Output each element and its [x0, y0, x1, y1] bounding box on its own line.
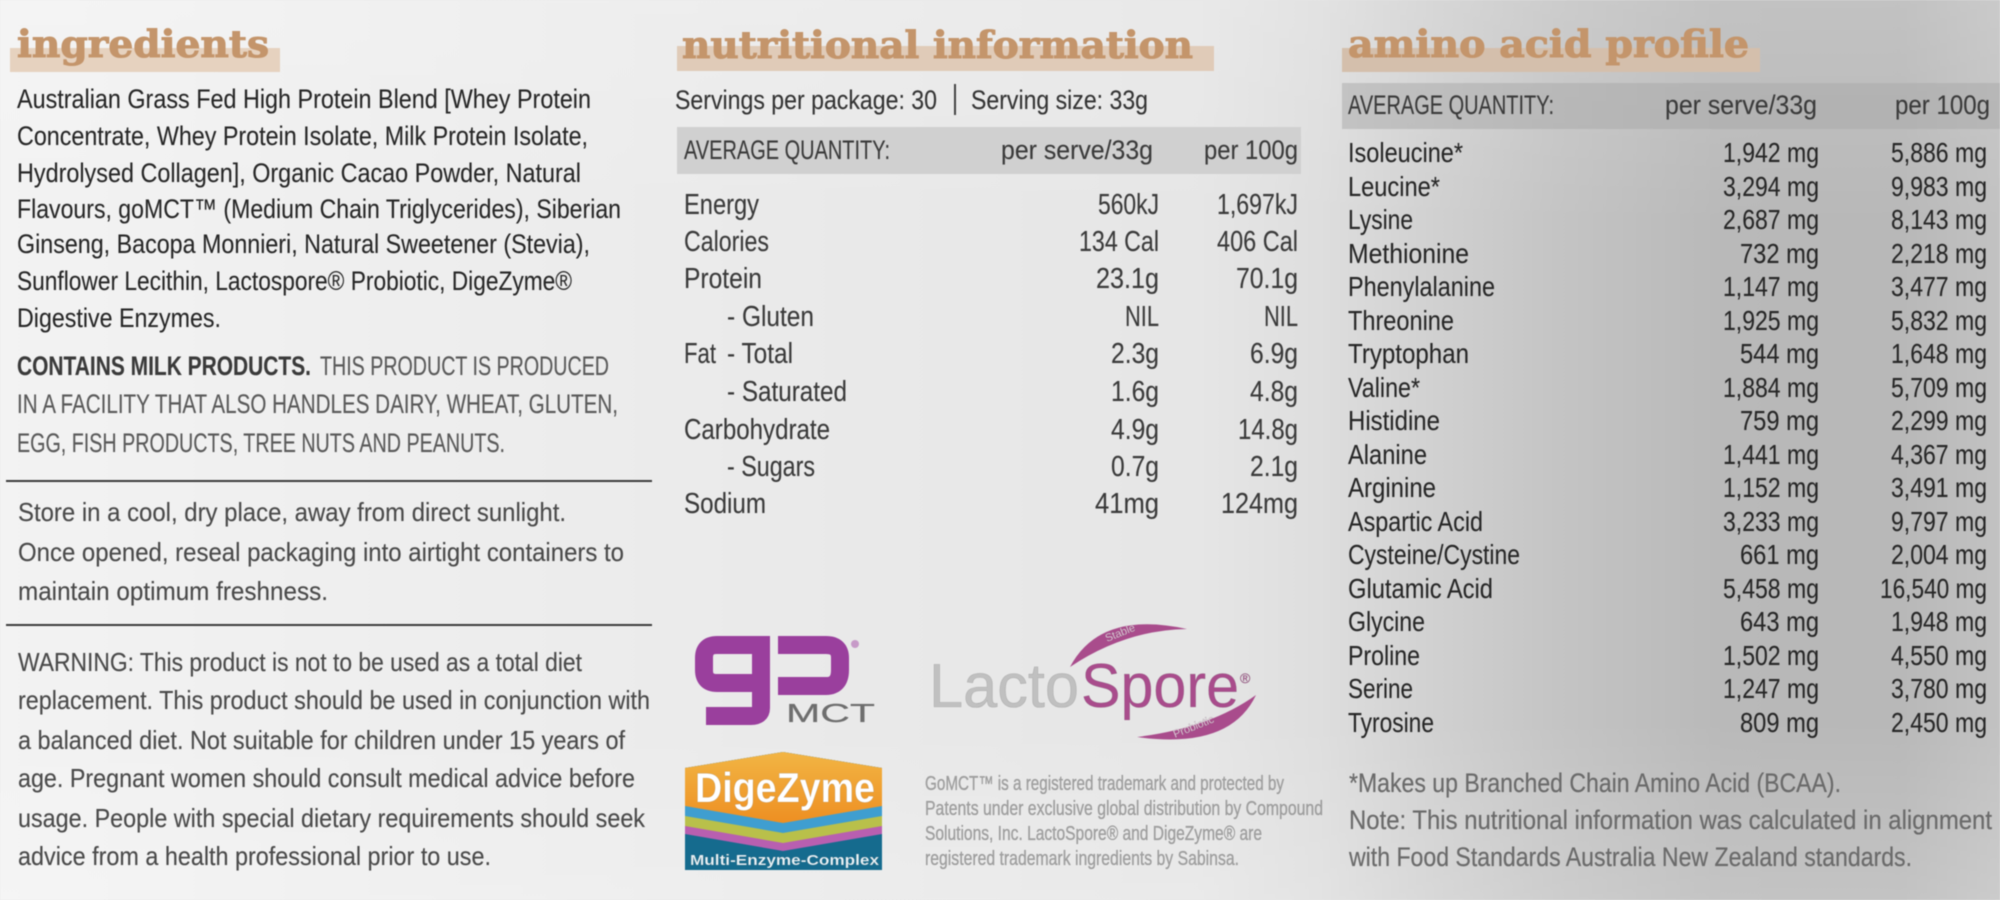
- heading: nutritional information: nutritional information: [682, 23, 1193, 67]
- row: calories: 406 Cal: [1217, 226, 1298, 258]
- icon: DigeZyme logo: DigeZyme: [695, 764, 875, 811]
- row: aspartic acid: 3,233 mg: [1723, 506, 1819, 537]
- icon: LactoSpore logo: [929, 622, 1256, 741]
- row: serine: 1,247 mg: [1723, 673, 1819, 704]
- row: histidine: [1348, 405, 1987, 436]
- row: fat total: 6.9g: [1250, 338, 1298, 370]
- row: glycine: 643 mg: [1740, 606, 1819, 637]
- panel: nutritional information: [675, 23, 1323, 870]
- table header: AVERAGE QUANTITY:: [1348, 90, 1554, 120]
- row: gluten: [727, 301, 1298, 333]
- text block: storage: maintain optimum freshness.: [18, 576, 328, 606]
- row: valine: [1348, 372, 1987, 403]
- row: tryptophan: [1348, 338, 1987, 369]
- row: alanine: 1,441 mg: [1723, 439, 1819, 470]
- icon: goMCT logo: [704, 640, 875, 728]
- row: fat total: - Total: [727, 338, 793, 370]
- row: alanine: [1348, 439, 1987, 470]
- row: sodium: 124mg: [1221, 488, 1298, 520]
- row: sugars: 2.1g: [1250, 451, 1298, 483]
- row: carbohydrate: 4.9g: [1111, 414, 1159, 446]
- text block: warning: usage. People with special dietary requirements should seek: [18, 803, 646, 833]
- row: saturated: [727, 376, 1298, 408]
- row: isoleucine: 1,942 mg: [1723, 137, 1819, 168]
- text block: allergen statement: IN A FACILITY THAT ALSO HANDLES DAIRY, WHEAT, GLUTEN,: [17, 389, 618, 419]
- text block: warning: [18, 647, 650, 871]
- nutrition table rows: [684, 189, 1298, 520]
- row: sugars: [727, 451, 1298, 483]
- row: cysteine: [1348, 539, 1987, 570]
- row: sugars: - Sugars: [727, 451, 815, 483]
- row: threonine: Threonine: [1348, 305, 1454, 336]
- row: proline: Proline: [1348, 640, 1420, 671]
- row: energy: 1,697kJ: [1217, 189, 1298, 221]
- amino acid table rows: [1348, 137, 1987, 738]
- row: phenylalanine: 1,147 mg: [1723, 271, 1819, 302]
- row: histidine: 759 mg: [1740, 405, 1819, 436]
- row: proline: [1348, 640, 1987, 671]
- row: sodium: 41mg: [1095, 488, 1159, 520]
- text block: ingredient list: Digestive Enzymes.: [17, 303, 221, 333]
- text block: ingredient list: [17, 84, 621, 333]
- row: glycine: [1348, 606, 1987, 637]
- row: sodium: Sodium: [684, 488, 766, 520]
- table header: per serve/33g: [1665, 90, 1817, 120]
- row: arginine: [1348, 472, 1987, 503]
- text block: ingredient list: Flavours, goMCT™ (Medium Chain Triglycerides), Siberian: [17, 194, 621, 224]
- row: gluten: - Gluten: [727, 301, 814, 333]
- row: arginine: 1,152 mg: [1723, 472, 1819, 503]
- row: cysteine: 661 mg: [1740, 539, 1819, 570]
- row: histidine: Histidine: [1348, 405, 1440, 436]
- text block: allergen statement: CONTAINS MILK PRODUCTS.: [17, 351, 311, 381]
- text block: storage: Once opened, reseal packaging into airtight containers to: [18, 537, 624, 567]
- row: calories: [684, 226, 1298, 258]
- table header: per 100g: [1895, 90, 1990, 120]
- icon: LactoSpore logo: Probiotic: [1172, 713, 1216, 741]
- servings line: Serving size: 33g: [971, 85, 1148, 115]
- text block: ingredient list: Sunflower Lecithin, Lactospore® Probiotic, DigeZyme®: [17, 266, 572, 296]
- row: protein: 70.1g: [1236, 263, 1298, 295]
- row: fat total: Fat: [684, 338, 716, 370]
- text block: ingredient list: Australian Grass Fed High Protein Blend [Whey Protein: [17, 84, 591, 114]
- heading: ingredients: ingredients: [17, 22, 269, 66]
- row: glutamic acid: 5,458 mg: [1723, 573, 1819, 604]
- servings line: Servings per package: 30: [675, 85, 937, 115]
- row: serine: [1348, 673, 1987, 704]
- icon: DigeZyme logo: [685, 752, 882, 870]
- table header: per serve/33g: [1001, 135, 1153, 165]
- row: tryptophan: Tryptophan: [1348, 338, 1469, 369]
- row: saturated: 1.6g: [1111, 376, 1159, 408]
- row: energy: [684, 189, 1298, 221]
- row: saturated: - Saturated: [727, 376, 847, 408]
- row: sugars: 0.7g: [1111, 451, 1159, 483]
- icon: LactoSpore logo: Spore: [1081, 652, 1239, 721]
- row: carbohydrate: 14.8g: [1238, 414, 1298, 446]
- table header: [1342, 83, 2000, 129]
- row: leucine: [1348, 171, 1987, 202]
- row: tyrosine: 809 mg: [1740, 707, 1819, 738]
- row: proline: 1,502 mg: [1723, 640, 1819, 671]
- row: protein: Protein: [684, 263, 762, 295]
- text block: ingredient list: Hydrolysed Collagen], Organic Cacao Powder, Natural: [17, 158, 581, 188]
- row: energy: Energy: [684, 189, 759, 221]
- row: saturated: 4.8g: [1250, 376, 1298, 408]
- row: lysine: [1348, 204, 1987, 235]
- row: isoleucine: [1348, 137, 1987, 168]
- text block: trademark note: Patents under exclusive global distribution by Compound: [925, 798, 1323, 820]
- row: serine: Serine: [1348, 673, 1413, 704]
- text block: trademark note: GoMCT™ is a registered trademark and protected by: [925, 773, 1284, 795]
- row: cysteine: Cysteine/Cystine: [1348, 539, 1520, 570]
- row: fat total: [684, 338, 1298, 370]
- icon: DigeZyme logo: Multi-Enzyme-Complex: [690, 852, 880, 869]
- text block: ingredient list: Ginseng, Bacopa Monnieri, Natural Sweetener (Stevia),: [17, 229, 590, 259]
- text block: warning: advice from a health professional prior to use.: [18, 841, 491, 871]
- row: leucine: Leucine*: [1348, 171, 1440, 202]
- row: tryptophan: 544 mg: [1740, 338, 1819, 369]
- row: calories: Calories: [684, 226, 769, 258]
- row: protein: 23.1g: [1096, 263, 1159, 295]
- panel: ingredients: [6, 22, 652, 871]
- panel: amino acid profile: [1342, 22, 2000, 872]
- text block: storage: Store in a cool, dry place, away from direct sunlight.: [18, 497, 566, 527]
- row: methionine: Methionine: [1348, 238, 1469, 269]
- row: threonine: 1,925 mg: [1723, 305, 1819, 336]
- text block: BCAA and standards notes: *Makes up Branched Chain Amino Acid (BCAA).: [1349, 768, 1841, 798]
- text block: trademark note: registered trademark ingredients by Sabinsa.: [925, 848, 1239, 870]
- row: methionine: [1348, 238, 1987, 269]
- row: methionine: 732 mg: [1740, 238, 1819, 269]
- row: valine: Valine*: [1348, 372, 1420, 403]
- icon: LactoSpore logo: Lacto: [929, 652, 1079, 721]
- row: tyrosine: [1348, 707, 1987, 738]
- row: alanine: Alanine: [1348, 439, 1427, 470]
- text block: trademark note: [925, 773, 1323, 870]
- icon: LactoSpore logo: Stable: [1104, 622, 1137, 645]
- icon: LactoSpore logo: ®: [1240, 670, 1251, 686]
- row: lysine: 2,687 mg: [1723, 204, 1819, 235]
- row: threonine: [1348, 305, 1987, 336]
- text block: warning: a balanced diet. Not suitable for children under 15 years of: [18, 725, 626, 755]
- row: glutamic acid: Glutamic Acid: [1348, 573, 1493, 604]
- text block: BCAA and standards notes: with Food Standards Australia New Zealand standards.: [1348, 842, 1912, 872]
- row: energy: 560kJ: [1098, 189, 1159, 221]
- row: valine: 1,884 mg: [1723, 372, 1819, 403]
- text block: allergen statement: THIS PRODUCT IS PRODUCED: [320, 351, 609, 381]
- row: aspartic acid: [1348, 506, 1987, 537]
- row: calories: 134 Cal: [1079, 226, 1159, 258]
- table header: [677, 127, 1301, 174]
- text block: allergen statement: [17, 351, 618, 458]
- row: lysine: Lysine: [1348, 204, 1413, 235]
- text block: warning: age. Pregnant women should consult medical advice before: [18, 763, 635, 793]
- row: carbohydrate: [684, 414, 1298, 446]
- row: isoleucine: Isoleucine*: [1348, 137, 1463, 168]
- servings line: [675, 84, 1148, 115]
- icon: goMCT logo: MCT: [786, 698, 875, 728]
- table header: AVERAGE QUANTITY:: [684, 135, 890, 165]
- row: phenylalanine: [1348, 271, 1987, 302]
- text block: warning: replacement. This product should be used in conjunction with: [18, 685, 650, 715]
- row: aspartic acid: Aspartic Acid: [1348, 506, 1483, 537]
- text block: storage: [18, 497, 624, 606]
- row: glutamic acid: [1348, 573, 1987, 604]
- text block: ingredient list: Concentrate, Whey Protein Isolate, Milk Protein Isolate,: [17, 121, 588, 151]
- heading: amino acid profile: amino acid profile: [1348, 22, 1749, 66]
- row: carbohydrate: Carbohydrate: [684, 414, 830, 446]
- row: protein: [684, 263, 1298, 295]
- row: leucine: 3,294 mg: [1723, 171, 1819, 202]
- text block: trademark note: Solutions, Inc. LactoSpore® and DigeZyme® are: [925, 823, 1262, 845]
- row: gluten: NIL: [1264, 301, 1298, 333]
- row: fat total: 2.3g: [1111, 338, 1159, 370]
- row: tyrosine: Tyrosine: [1348, 707, 1434, 738]
- row: phenylalanine: Phenylalanine: [1348, 271, 1495, 302]
- text block: warning: WARNING: This product is not to be used as a total diet: [18, 647, 583, 677]
- table header: per 100g: [1204, 135, 1298, 165]
- text block: BCAA and standards notes: [1348, 768, 1992, 872]
- text block: allergen statement: EGG, FISH PRODUCTS, TREE NUTS AND PEANUTS.: [17, 428, 505, 458]
- row: glycine: Glycine: [1348, 606, 1425, 637]
- row: sodium: [684, 488, 1298, 520]
- row: arginine: Arginine: [1348, 472, 1436, 503]
- row: gluten: NIL: [1125, 301, 1159, 333]
